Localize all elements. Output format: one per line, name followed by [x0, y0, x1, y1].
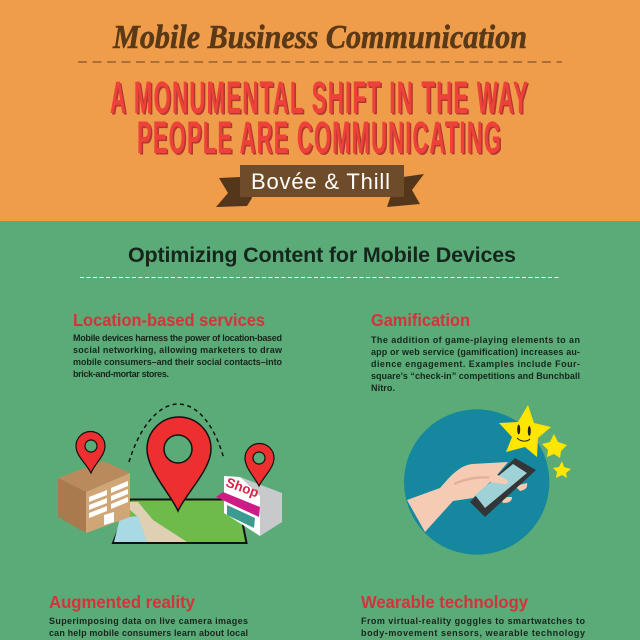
icon: building — [58, 461, 130, 533]
dashed arc — [129, 404, 224, 462]
text block: wearable technology: From virtual-reality goggles to smartwatches to — [361, 616, 586, 626]
headline — [110, 72, 530, 164]
text block: location-based services: Mobile devices harness the power of location-based — [73, 333, 282, 343]
icon: small star — [553, 461, 571, 478]
icon: shop: Shop — [224, 475, 261, 500]
text block: wearable technology: Wearable technology — [361, 592, 528, 612]
text block: location-based services: mobile consumers–and their social contacts–into — [73, 357, 282, 367]
text block: gamification: app or web service (gamification) increases au- — [371, 347, 580, 357]
icon: large location pin — [147, 417, 211, 511]
text block: augmented reality: Superimposing data on live camera images — [49, 616, 248, 626]
text block: location-based services: brick-and-mortar stores. — [73, 369, 169, 379]
illustration: gamification phone — [404, 405, 571, 555]
text block: augmented reality: can help mobile consumers learn about local — [49, 628, 248, 638]
text block: wearable technology — [361, 592, 586, 638]
text block: gamification: square's “check-in” competitions and Bunchball — [371, 371, 580, 381]
icon: hand — [407, 462, 508, 532]
text block: augmented reality: Augmented reality — [49, 592, 195, 612]
text block: gamification: Gamification — [371, 310, 470, 330]
panel: green content — [0, 221, 640, 640]
text block: gamification — [371, 310, 580, 393]
illustration: location map — [58, 404, 282, 543]
icon: right location pin — [245, 444, 274, 486]
panel: orange header — [0, 0, 640, 221]
ribbon banner — [216, 165, 424, 207]
icon: smiling star — [499, 405, 551, 457]
icon: medium star — [542, 434, 567, 458]
text block: location-based services — [73, 310, 283, 379]
icon: left location pin — [76, 432, 105, 473]
title: Mobile Business Communication — [112, 19, 527, 56]
ribbon banner: Bovée & Thill — [251, 169, 390, 194]
text block: wearable technology: body-movement sensors, wearable technology — [361, 628, 585, 638]
icon: smartphone — [470, 458, 536, 517]
text block: location-based services: social networking, allowing marketers to draw — [73, 345, 283, 355]
text block: location-based services: Location-based services — [73, 310, 265, 330]
text block: augmented reality — [49, 592, 248, 638]
text block: gamification: dience engagement. Examples include Four- — [371, 359, 580, 369]
text block: gamification: The addition of game-playing elements to an — [371, 335, 580, 345]
icon: back fingers — [500, 483, 527, 503]
section heading: Optimizing Content for Mobile Devices — [128, 243, 516, 267]
text block: gamification: Nitro. — [371, 383, 395, 393]
map — [113, 500, 246, 543]
icon: shop — [216, 475, 282, 536]
